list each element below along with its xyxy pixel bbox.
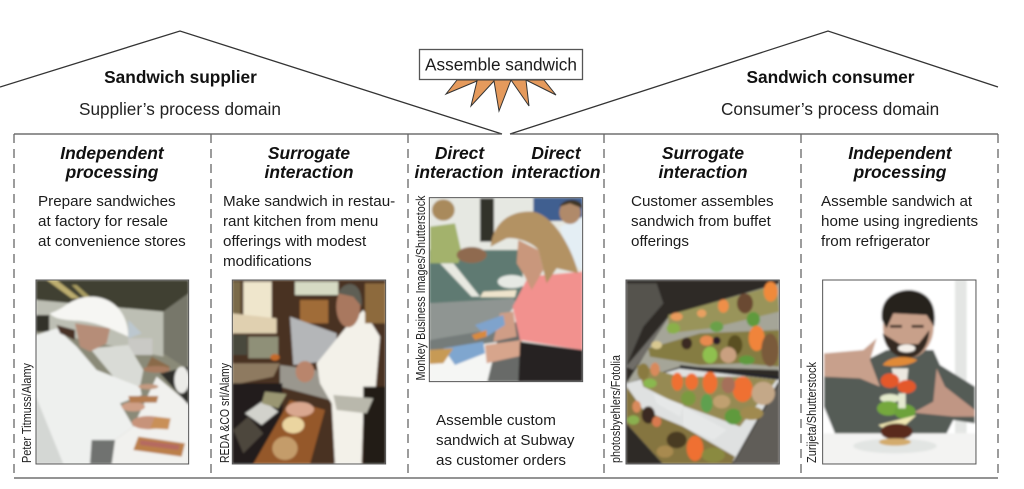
heading: sandwich consumer: Sandwich consumer: [746, 67, 915, 87]
heading: Surrogate: [662, 143, 744, 163]
label: consumer's process domain: Consumer’s process domain: [721, 99, 939, 119]
heading: right: interaction: [512, 162, 600, 182]
supplier roof: [0, 31, 502, 134]
row C: [637, 365, 777, 427]
label box: assemble sandwich: Assemble sandwich: [425, 54, 577, 74]
description: from refrigerator: [821, 233, 930, 250]
heading: left: interaction: [415, 162, 503, 182]
heading: Surrogate: [268, 143, 350, 163]
label: supplier's process domain: Supplier’s process domain: [79, 99, 281, 119]
description: home using ingredients: [821, 213, 978, 230]
description: Make sandwich in restau-: [223, 193, 395, 210]
credit: REDA &CO srl/Alamy: [217, 363, 232, 463]
description: at convenience stores: [38, 233, 186, 250]
row A: [668, 285, 779, 333]
consumer roof: [510, 31, 998, 134]
heading: sandwich supplier: Sandwich supplier: [104, 67, 257, 87]
photo: buffet tray of sandwiches: [626, 280, 779, 464]
row B: [648, 330, 779, 367]
credit: Zurijeta/Shutterstock: [804, 362, 819, 463]
heading: processing: [853, 162, 947, 182]
icon: assemble sandwich burst: [420, 50, 582, 111]
description: offerings with modest: [223, 233, 367, 250]
heading: interaction: [659, 162, 747, 182]
description: Customer assembles: [631, 193, 774, 210]
description: rant kitchen from menu: [223, 213, 378, 230]
description: Assemble sandwich at: [821, 193, 973, 210]
description: sandwich at Subway: [436, 432, 575, 449]
description: sandwich from buffet: [631, 213, 772, 230]
heading: Independent: [848, 143, 953, 163]
credit: photosbyehlers/Fotolia: [608, 354, 623, 463]
description: offerings: [631, 233, 689, 250]
panel: consumer independent processing: [804, 143, 978, 464]
description: Prepare sandwiches: [38, 193, 176, 210]
description: as customer orders: [436, 452, 566, 469]
description: Assemble custom: [436, 412, 556, 429]
panel: supplier independent processing: [19, 143, 189, 464]
photo: chef in restaurant kitchen: [232, 280, 386, 464]
label box: assemble sandwich: [420, 50, 582, 80]
panel: direct interaction: [413, 143, 600, 469]
description: modifications: [223, 253, 312, 270]
heading: interaction: [265, 162, 353, 182]
description: at factory for resale: [38, 213, 168, 230]
panel: consumer surrogate interaction: [608, 143, 779, 464]
heading: Independent: [60, 143, 165, 163]
credit: Peter Titmuss/Alamy: [19, 363, 34, 463]
photo: man assembling flying sandwich at home: [823, 280, 976, 464]
heading: left: Direct: [435, 143, 485, 163]
frame of the five columns: [14, 134, 998, 478]
credit: Monkey Business Images/Shutterstock: [413, 195, 428, 380]
panel: supplier surrogate interaction: [217, 143, 395, 464]
photo: factory workers preparing sandwiches: [36, 280, 189, 464]
heading: right: Direct: [531, 143, 582, 163]
row D: [627, 387, 735, 464]
heading: processing: [65, 162, 159, 182]
photo: woman assembling sandwich at Subway: [429, 198, 583, 382]
